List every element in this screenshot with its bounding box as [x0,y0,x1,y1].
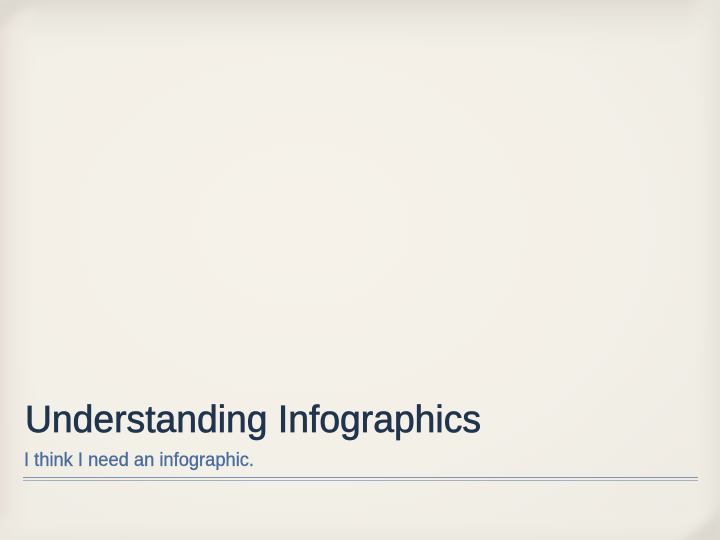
double rule [23,477,698,481]
title: Understanding Infographics [25,399,481,441]
subtitle: I think I need an infographic. [24,450,254,471]
